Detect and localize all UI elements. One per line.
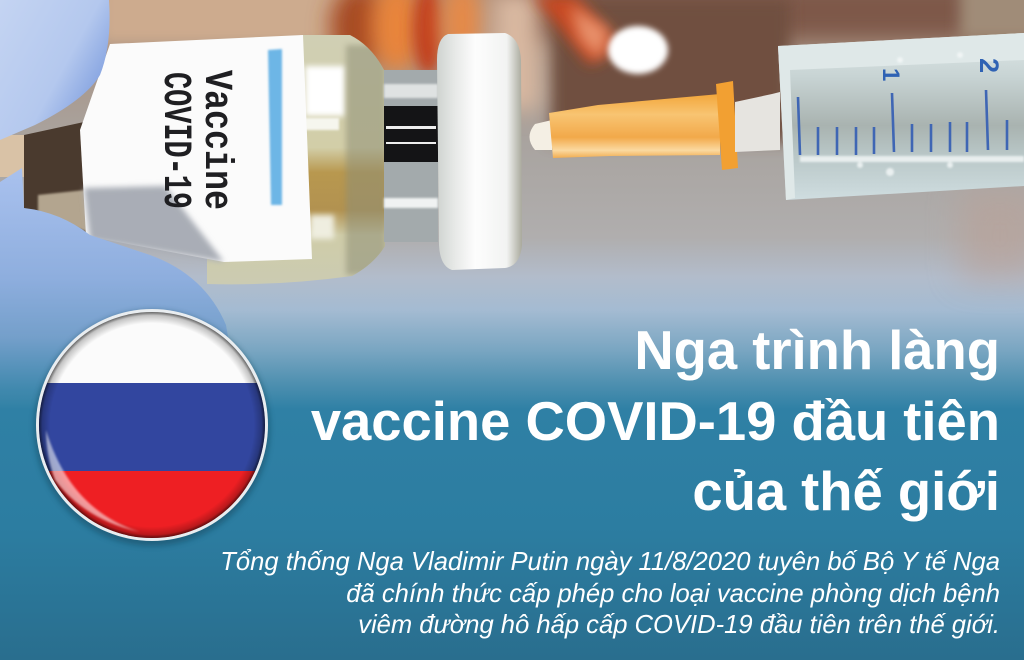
- needle tip: [530, 120, 552, 150]
- vial glass body: [207, 35, 385, 284]
- blurred background lights: [100, 0, 1024, 280]
- vial: [0, 33, 522, 284]
- dark glass behind fingers: [24, 122, 90, 235]
- vial label: Vaccine: [193, 70, 238, 210]
- stem: [735, 92, 780, 152]
- lower finger: [0, 168, 240, 410]
- syringe numbers: 1: [877, 68, 904, 81]
- intro paragraph: Tổng thống Nga Vladimir Putin ngày 11/8/2020 tuyên bố Bộ Y tế Nga: [220, 548, 1000, 576]
- barrel: [778, 33, 1024, 200]
- gloved fingers: [0, 0, 240, 410]
- title: của thế giới: [692, 461, 1000, 522]
- syringe: [530, 33, 1024, 200]
- syringe: 2: [974, 58, 1004, 73]
- vial label: COVID-19: [152, 72, 197, 209]
- vial cap: [437, 33, 522, 270]
- upper finger: [0, 0, 110, 140]
- small beige gap at left: [0, 135, 24, 177]
- intro paragraph: đã chính thức cấp phép cho loại vaccine phòng dịch bệnh: [346, 580, 1000, 608]
- title: [311, 320, 1000, 522]
- vial label: [80, 35, 312, 262]
- intro paragraph: [220, 548, 1000, 639]
- tick marks: [798, 90, 1007, 155]
- Russian flag badge: [30, 300, 280, 546]
- orange hub: [549, 94, 720, 158]
- vial neck: [384, 70, 438, 242]
- title: Nga trình làng: [634, 320, 1000, 381]
- title: vaccine COVID-19 đầu tiên: [311, 390, 1000, 452]
- intro paragraph: viêm đường hô hấp cấp COVID-19 đầu tiên trên thế giới.: [358, 611, 1000, 639]
- glass speckles: [800, 52, 1024, 176]
